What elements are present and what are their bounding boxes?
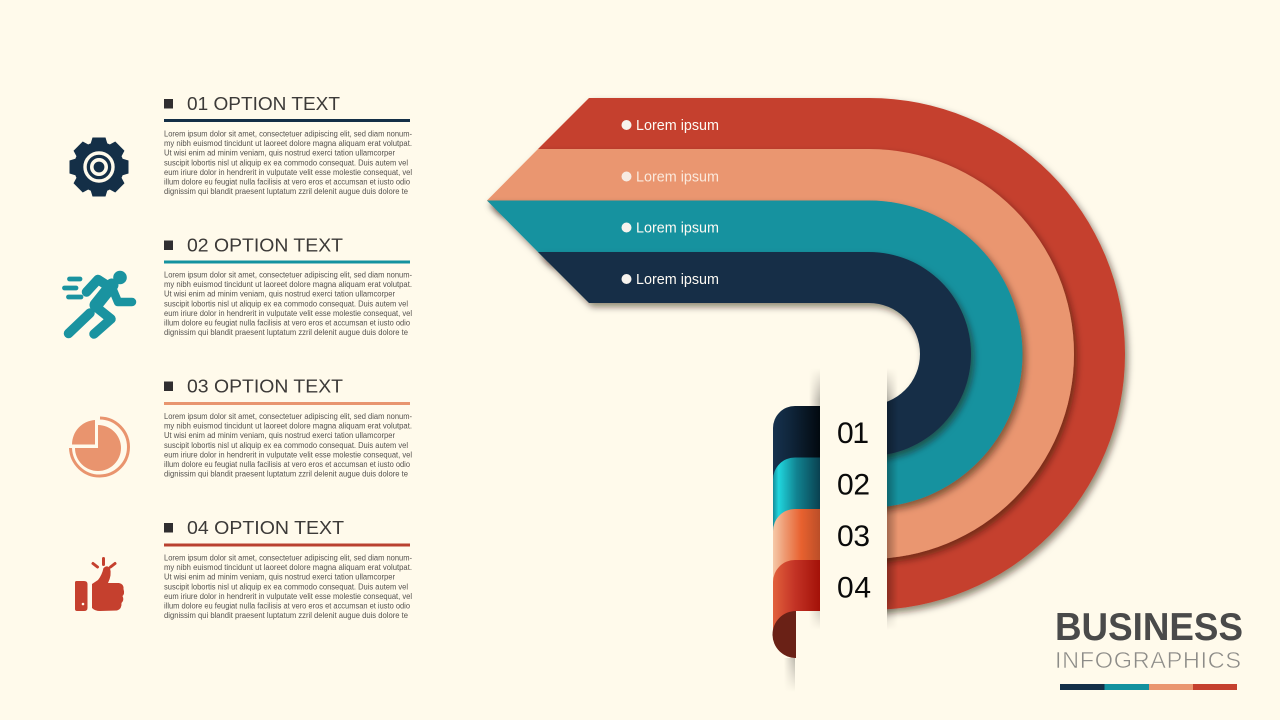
body text: suscipit lobortis nisl ut aliquip ex ea commodo consequat. Duis autem vel xyxy=(164,582,408,591)
body text: illum dolore eu feugiat nulla facilisis at vero eros et accumsan et iusto odio xyxy=(164,318,411,328)
body text: Lorem ipsum dolor sit amet, consectetuer adipiscing elit, sed diam nonum- xyxy=(164,412,412,421)
bullet square xyxy=(164,382,173,391)
bullet square xyxy=(164,240,173,250)
icon: gear xyxy=(70,138,128,196)
body text: Ut wisi enim ad minim veniam, quis nostrud exerci tation ullamcorper xyxy=(164,290,395,299)
label: red band: Lorem ipsum xyxy=(636,117,719,134)
ribbon: navy xyxy=(773,406,820,490)
colour bar xyxy=(1060,684,1237,690)
icon: thumbs up xyxy=(75,558,124,611)
body text: suscipit lobortis nisl ut aliquip ex ea commodo consequat. Duis autem vel xyxy=(164,441,408,450)
body text: dignissim qui blandit praesent luptatum zzril delenit augue duis dolore te xyxy=(164,611,409,620)
body text: my nibh euismod tincidunt ut laoreet dolore magna aliquam erat volutpat. xyxy=(164,139,412,148)
body text: eum iriure dolor in hendrerit in vulputate velit esse molestie consequat, vel xyxy=(164,592,412,601)
ribbon: orange xyxy=(773,509,820,590)
heading: 03: 03 OPTION TEXT xyxy=(187,377,343,397)
heading: 02: 02 OPTION TEXT xyxy=(187,236,343,256)
heading rule xyxy=(164,260,410,264)
body text xyxy=(164,412,412,479)
body text: my nibh euismod tincidunt ut laoreet dolore magna aliquam erat volutpat. xyxy=(164,280,412,289)
body text: eum iriure dolor in hendrerit in vulputate velit esse molestie consequat, vel xyxy=(164,168,412,177)
body text xyxy=(164,270,412,337)
band: orange xyxy=(487,149,1074,559)
number: 03: 03 xyxy=(837,520,870,553)
subtitle: INFOGRAPHICS: INFOGRAPHICS xyxy=(1055,647,1241,673)
ribbon: teal xyxy=(773,458,820,540)
icon: runner xyxy=(64,271,132,334)
label: orange band: Lorem ipsum xyxy=(636,168,719,186)
body text: my nibh euismod tincidunt ut laoreet dolore magna aliquam erat volutpat. xyxy=(164,422,412,431)
label: navy band: Lorem ipsum xyxy=(636,271,719,288)
body text: illum dolore eu feugiat nulla facilisis at vero eros et accumsan et iusto odio xyxy=(164,178,411,186)
number: 02: 02 xyxy=(837,468,870,502)
panel: option 01 xyxy=(164,94,412,196)
body text: illum dolore eu feugiat nulla facilisis at vero eros et accumsan et iusto odio xyxy=(164,460,411,469)
body text: suscipit lobortis nisl ut aliquip ex ea commodo consequat. Duis autem vel xyxy=(164,158,408,167)
body text: Lorem ipsum dolor sit amet, consectetuer adipiscing elit, sed diam nonum- xyxy=(164,554,412,562)
body text xyxy=(164,554,412,620)
title: BUSINESS: BUSINESS xyxy=(1055,606,1243,649)
panel: option 02 xyxy=(164,236,412,337)
body text: Ut wisi enim ad minim veniam, quis nostrud exerci tation ullamcorper xyxy=(164,149,395,158)
body text: my nibh euismod tincidunt ut laoreet dolore magna aliquam erat volutpat. xyxy=(164,563,412,572)
heading: 04: 04 OPTION TEXT xyxy=(187,518,344,538)
body text: dignissim qui blandit praesent luptatum zzril delenit augue duis dolore te xyxy=(164,328,409,337)
title block xyxy=(1055,606,1243,690)
body text: dignissim qui blandit praesent luptatum zzril delenit augue duis dolore te xyxy=(164,470,409,479)
icon: pie chart xyxy=(70,418,128,476)
panel: number strip xyxy=(820,365,887,633)
heading rule xyxy=(164,402,410,405)
number: 01: 01 xyxy=(837,417,869,450)
body text: Lorem ipsum dolor sit amet, consectetuer adipiscing elit, sed diam nonum- xyxy=(164,130,412,138)
band: navy xyxy=(538,252,971,456)
label: teal band: Lorem ipsum xyxy=(636,220,719,236)
body text: eum iriure dolor in hendrerit in vulputate velit esse molestie consequat, vel xyxy=(164,309,412,318)
band: teal xyxy=(487,200,1022,508)
body text: dignissim qui blandit praesent luptatum zzril delenit augue duis dolore te xyxy=(164,187,409,196)
bullet square xyxy=(164,99,173,108)
panel: folded ribbon xyxy=(772,406,820,658)
body text: suscipit lobortis nisl ut aliquip ex ea commodo consequat. Duis autem vel xyxy=(164,299,408,308)
body text: eum iriure dolor in hendrerit in vulputate velit esse molestie consequat, vel xyxy=(164,450,412,459)
body text: illum dolore eu feugiat nulla facilisis at vero eros et accumsan et iusto odio xyxy=(164,602,411,610)
ribbon: curl xyxy=(772,611,796,658)
band: red xyxy=(538,98,1125,610)
heading: 01: 01 OPTION TEXT xyxy=(187,94,340,114)
heading rule xyxy=(164,544,410,546)
body text xyxy=(164,130,412,196)
body text: Lorem ipsum dolor sit amet, consectetuer adipiscing elit, sed diam nonum- xyxy=(164,270,412,280)
ribbon: red xyxy=(773,560,820,636)
panel: option 03 xyxy=(164,377,412,479)
body text: Ut wisi enim ad minim veniam, quis nostrud exerci tation ullamcorper xyxy=(164,431,395,440)
heading rule xyxy=(164,119,410,122)
chart: curved arrow bands xyxy=(487,98,1125,610)
number: 04: 04 xyxy=(837,572,871,604)
body text: Ut wisi enim ad minim veniam, quis nostrud exerci tation ullamcorper xyxy=(164,573,395,582)
bullet square xyxy=(164,523,173,532)
panel: option 04 xyxy=(164,518,412,620)
